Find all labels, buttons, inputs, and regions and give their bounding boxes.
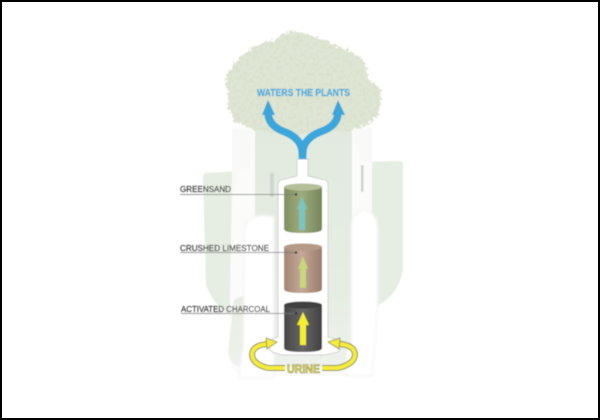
planter green inner body bbox=[228, 128, 352, 367]
right white channel bbox=[346, 210, 378, 376]
label: greensand bbox=[180, 184, 297, 196]
label: greensand: GREENSAND bbox=[180, 184, 231, 194]
planter outer body bbox=[229, 128, 372, 376]
central filter column bbox=[265, 159, 345, 355]
cylinder: greensand bbox=[284, 184, 322, 233]
label: activated charcoal: ACTIVATED CHARCOAL bbox=[181, 304, 270, 314]
cylinder: activated charcoal bbox=[284, 302, 322, 352]
arrow: lime up bbox=[298, 256, 308, 288]
arrow: right urine flow bbox=[322, 338, 355, 368]
panel: left back fin bbox=[203, 130, 256, 325]
arrow: yellow up bbox=[297, 312, 309, 345]
heading: waters the plants: WATERS THE PLANTS bbox=[257, 87, 350, 99]
plant foliage bbox=[225, 32, 381, 134]
left white channel bbox=[238, 215, 274, 378]
label: urine: URINE bbox=[287, 362, 320, 376]
planter diagram bbox=[180, 32, 403, 378]
cylinder: crushed limestone bbox=[284, 244, 322, 293]
arrow: teal up bbox=[297, 196, 307, 230]
left small tube bbox=[270, 173, 274, 197]
label: crushed limestone: CRUSHED LIMESTONE bbox=[180, 243, 269, 253]
arrow: blue split to plants bbox=[262, 100, 345, 159]
arrow: left urine flow bbox=[252, 338, 285, 368]
panel: right back fin bbox=[355, 130, 403, 312]
right small tube bbox=[361, 165, 364, 192]
